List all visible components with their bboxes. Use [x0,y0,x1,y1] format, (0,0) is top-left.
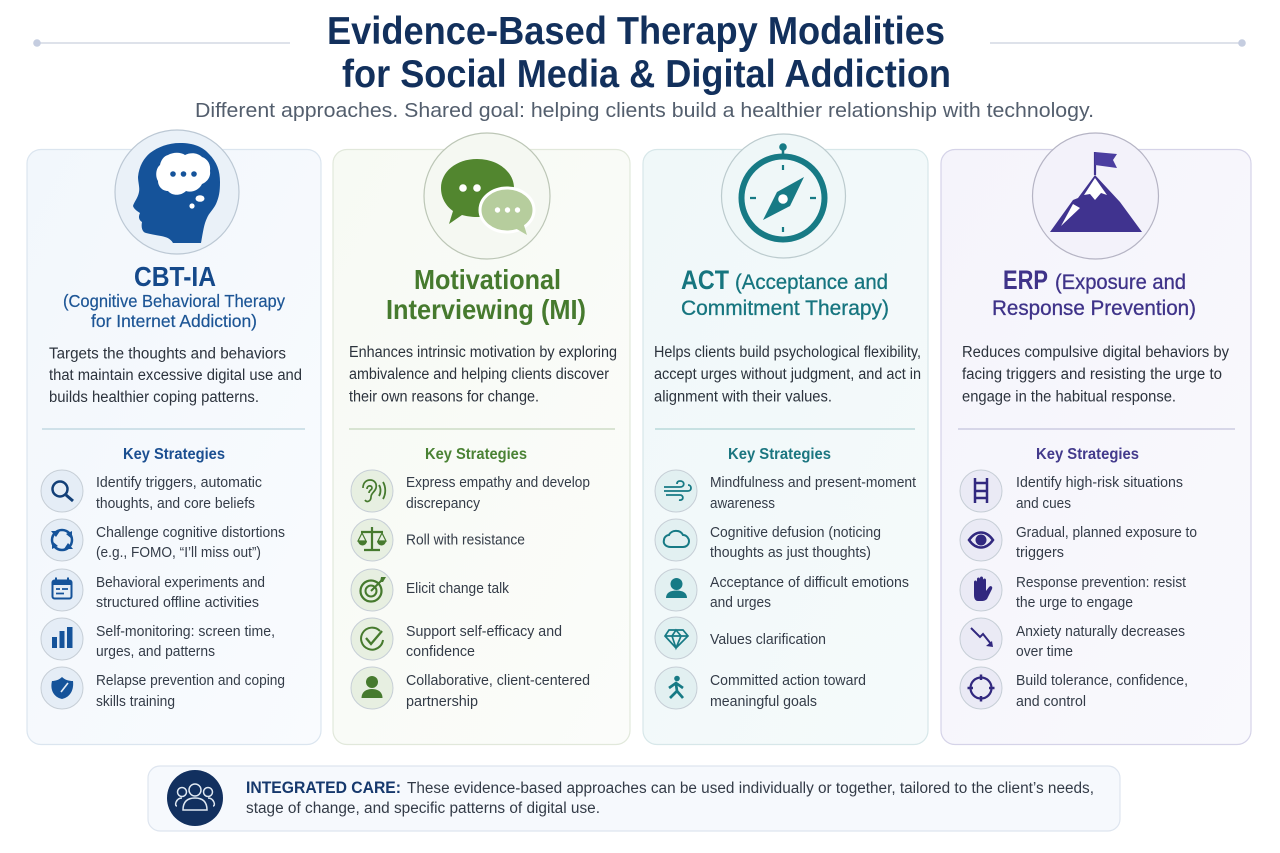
subtitle: Different approaches. Shared goal: helping clients build a healthier relationship with technology. [195,99,1094,122]
description: Helps clients build psychological flexibility, [654,344,921,361]
strategy: gradual exposure: triggers [1016,545,1064,561]
strategy: cognitive defusion [655,519,881,561]
strategy: values clarification: Values clarification [710,632,826,648]
heading: ERP: (Exposure and [1055,271,1186,294]
heading: Key Strategies: Key Strategies [728,446,831,463]
heading: ERP: Response Prevention) [992,297,1196,320]
strategy: response prevention: Response prevention: resist [1016,575,1186,591]
strategy: build tolerance: Build tolerance, confidence, [1016,673,1188,689]
strategy: committed action [655,667,866,710]
strategy: build tolerance: and control [1016,694,1086,710]
strategy: anxiety decreases: Anxiety naturally decreases [1016,624,1185,640]
strategy: elicit change talk [351,569,510,611]
strategy: acceptance: and urges [710,595,771,611]
description: ambivalence and helping clients discover [349,366,609,383]
strategy: challenge distortions: Challenge cognitive distortions [96,525,285,541]
strategy: support self-efficacy [351,618,562,660]
strategy: identify high-risk [960,470,1183,512]
description: their own reasons for change. [349,388,539,406]
title: Evidence-Based Therapy Modalities [327,10,945,53]
strategy: response prevention: the urge to engage [1016,595,1133,611]
title [327,10,951,96]
strategy: mindfulness [655,470,916,512]
heading: Key Strategies: Key Strategies [425,446,527,463]
icon: group of people [167,770,223,826]
description: Enhances intrinsic motivation by exploring [349,344,617,361]
heading: ERP [992,265,1196,320]
strategy: anxiety decreases: over time [1016,644,1073,660]
strategy: roll with resistance: Roll with resistance [406,532,525,548]
strategy: collaborative partnership: partnership [406,694,478,710]
header decoration: left rule [33,39,290,47]
strategy: mindfulness: Mindfulness and present-moment [710,475,916,491]
heading: Key Strategies: Key Strategies [123,446,225,463]
strategy: response prevention [960,569,1186,611]
sub-heading: full name: for Internet Addiction) [91,311,257,331]
description: builds healthier coping patterns. [49,389,259,406]
header decoration: right rule [990,39,1246,47]
strategy: committed action: Committed action toward [710,673,866,689]
heading: ACT: (Acceptance and [735,271,888,294]
strategy: relapse prevention: skills training [96,694,175,710]
heading: CBT-IA: CBT-IA [134,261,216,292]
heading: ACT: Commitment Therapy) [681,297,889,320]
icon: speech bubbles [424,133,550,259]
strategy: support self-efficacy: Support self-efficacy and [406,624,562,640]
description [49,346,302,406]
description: that maintain excessive digital use and [49,367,302,384]
strategy: self-monitoring [41,618,275,660]
description [654,344,921,406]
panel: ERP [941,133,1251,744]
strategy: express empathy [351,470,590,512]
icon: compass [722,134,846,258]
strategy: cognitive defusion: Cognitive defusion (noticing [710,525,881,541]
strategy: support self-efficacy: confidence [406,644,475,660]
callout text: stage of change, and specific patterns of digital use. [246,800,600,817]
heading: Motivational Interviewing (MI): Motivational [414,264,561,295]
description [349,344,617,406]
strategy: gradual exposure: Gradual, planned exposure to [1016,525,1197,541]
strategy: express empathy: Express empathy and develop [406,475,590,491]
strategy: anxiety decreases [960,618,1185,660]
title: for Social Media & Digital Addiction [342,53,951,96]
icon: head with thought bubble [115,130,239,254]
heading: Key Strategies: Key Strategies [1036,446,1139,463]
callout text: INTEGRATED CARE: [246,779,401,797]
heading: Motivational Interviewing (MI): Interviewing (MI) [386,294,586,325]
strategy: build tolerance [960,667,1188,710]
strategy: identify triggers [41,470,262,512]
strategy: behavioral experiments: Behavioral experiments and [96,575,265,591]
description: alignment with their values. [654,388,832,406]
strategy: relapse prevention: Relapse prevention and coping [96,673,285,689]
description: facing triggers and resisting the urge to [962,366,1222,383]
panel: CBT-IA [27,130,321,744]
sub-heading: full name: (Cognitive Behavioral Therapy [63,291,285,311]
strategy: self-monitoring: Self-monitoring: screen time, [96,624,275,640]
strategy: committed action: meaningful goals [710,694,817,710]
description: engage in the habitual response. [962,388,1176,406]
panel: ACT [643,134,928,744]
icon: mountain with flag [1032,133,1158,259]
strategy: express empathy: discrepancy [406,496,481,512]
strategy: identify high-risk: and cues [1016,496,1071,512]
strategy: challenge distortions [41,519,285,561]
strategy: identify triggers: Identify triggers, automatic [96,475,262,491]
strategy: roll with resistance [351,519,525,561]
strategy: challenge distortions: (e.g., FOMO, “I’ll miss out”) [96,545,261,561]
panel: Motivational Interviewing [333,133,630,744]
strategy: collaborative partnership: Collaborative, client-centered [406,673,590,689]
strategy: self-monitoring: urges, and patterns [96,644,215,660]
strategy: identify triggers: thoughts, and core beliefs [96,496,255,512]
strategy: cognitive defusion: thoughts as just thoughts) [710,545,871,561]
strategy: behavioral experiments: structured offline activities [96,595,259,611]
description: Targets the thoughts and behaviors [49,346,286,362]
strategy: gradual exposure [960,519,1197,561]
description [962,344,1229,406]
strategy: elicit change talk: Elicit change talk [406,581,510,597]
strategy: values clarification [655,617,826,659]
description: Reduces compulsive digital behaviors by [962,344,1229,361]
description: accept urges without judgment, and act in [654,366,921,383]
strategy: mindfulness: awareness [710,496,775,512]
heading: Motivational Interviewing (MI) [386,264,586,325]
heading: ACT: ACT [681,265,729,295]
strategy: acceptance [655,569,909,611]
callout: integrated care [148,766,1120,831]
strategy: behavioral experiments [41,569,265,611]
strategy: acceptance: Acceptance of difficult emotions [710,575,909,591]
callout text [246,779,1094,817]
heading: ACT [681,265,889,320]
heading: ERP: ERP [1003,265,1048,295]
sub-heading: full name [63,291,285,331]
callout text: These evidence-based approaches can be used individually or together, tailored to the client’s needs, [407,780,1094,797]
strategy: identify high-risk: Identify high-risk situations [1016,475,1183,491]
strategy: collaborative partnership [351,667,590,710]
strategy: relapse prevention [41,667,285,710]
